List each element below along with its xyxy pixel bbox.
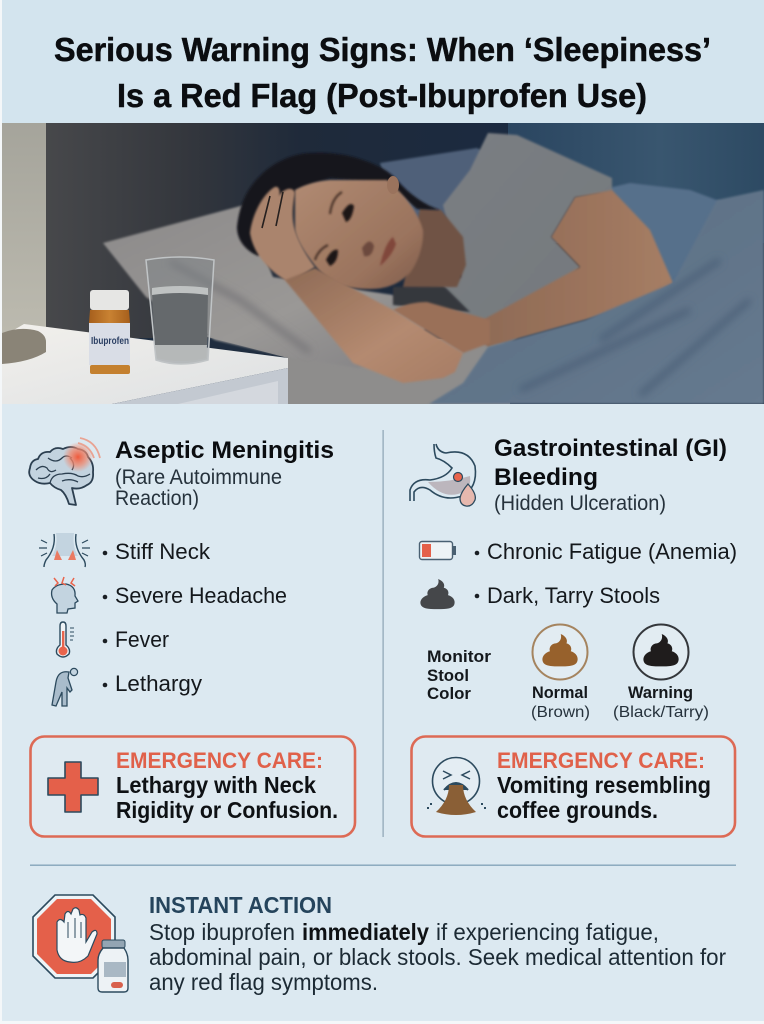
body text: abdominal pain, or black stools. Seek medical attention for xyxy=(149,944,726,970)
main pillow xyxy=(103,205,440,368)
stool color monitor xyxy=(427,624,709,721)
callout text xyxy=(116,748,338,823)
symptom: dark tarry stools xyxy=(420,579,660,609)
ear xyxy=(387,176,399,194)
callout text xyxy=(497,748,711,823)
panel: instant action xyxy=(33,892,726,995)
symptom: dark tarry stools: Dark, Tarry Stools xyxy=(487,583,660,608)
icon: brain xyxy=(29,438,100,505)
header band xyxy=(0,0,764,123)
symptom: stiff neck xyxy=(39,533,211,567)
monitor label: Monitor xyxy=(427,648,492,666)
heading: aseptic meningitis: Aseptic Meningitis xyxy=(115,437,334,464)
heading: gi bleeding: Gastrointestinal (GI) xyxy=(494,435,727,462)
back pillow xyxy=(379,147,480,218)
hand on forehead xyxy=(250,187,315,283)
symptom: fever: Fever xyxy=(115,627,169,652)
callout text: coffee grounds. xyxy=(497,797,658,823)
normal brown stool: Normal xyxy=(532,684,588,702)
lower hand xyxy=(393,302,490,353)
ibuprofen bottle: Ibuprofen xyxy=(91,335,129,347)
title: Is a Red Flag (Post-Ibuprofen Use) xyxy=(117,77,647,114)
subheading: Reaction) xyxy=(115,487,199,510)
monitor label: Color xyxy=(427,685,472,703)
nightstand xyxy=(2,324,288,404)
body text: any red flag symptoms. xyxy=(149,969,378,995)
hair xyxy=(237,153,440,256)
icon: stomach xyxy=(410,444,475,506)
heading: instant action: INSTANT ACTION xyxy=(149,892,332,918)
symptom: lethargy: Lethargy xyxy=(115,671,203,696)
callout text: EMERGENCY CARE: xyxy=(116,748,323,773)
title xyxy=(54,31,711,114)
normal brown stool xyxy=(531,624,590,721)
monitor label xyxy=(427,648,492,703)
subheading xyxy=(115,466,282,510)
warning black stool: (Black/Tarry) xyxy=(613,704,709,721)
water glass xyxy=(146,257,214,364)
heading: gi bleeding: Bleeding xyxy=(494,464,598,491)
symptom: fever xyxy=(56,622,169,657)
body text xyxy=(149,919,726,995)
body text: if experiencing fatigue, xyxy=(436,919,659,945)
symptom: lethargy xyxy=(52,668,203,706)
body text: immediately xyxy=(302,919,429,945)
symptom: stiff neck: Stiff Neck xyxy=(115,539,211,564)
heading: gi bleeding xyxy=(494,435,727,491)
lamp base xyxy=(2,329,46,364)
white edges xyxy=(0,0,2,1024)
eyes brows nose mouth xyxy=(315,192,396,266)
column divider xyxy=(382,430,384,837)
title: Serious Warning Signs: When ‘Sleepiness’ xyxy=(54,31,711,68)
face xyxy=(295,180,423,289)
warning black stool xyxy=(613,624,709,721)
callout text: Rigidity or Confusion. xyxy=(116,797,338,823)
symptom: severe headache xyxy=(52,577,287,613)
warning black stool: Warning xyxy=(628,684,693,702)
icon: stop sign with hand and pill bottle xyxy=(33,895,128,992)
body text: Stop ibuprofen xyxy=(149,919,295,945)
upper arm xyxy=(470,190,673,347)
duvet xyxy=(429,190,764,404)
callout text: EMERGENCY CARE: xyxy=(497,748,705,773)
callout text: Vomiting resembling xyxy=(497,772,711,798)
ibuprofen bottle xyxy=(89,290,130,374)
forearm xyxy=(285,268,463,383)
mattress sheet xyxy=(200,335,510,404)
panel: gastrointestinal bleeding xyxy=(410,435,737,836)
callout: emergency care left xyxy=(30,736,355,836)
symptom: chronic fatigue: Chronic Fatigue (Anemia) xyxy=(487,539,737,564)
icon: vomiting face xyxy=(427,758,486,815)
normal brown stool: (Brown) xyxy=(531,704,590,721)
callout text: Lethargy with Neck xyxy=(116,772,316,798)
under-arm shadow xyxy=(393,285,470,312)
back duvet xyxy=(612,182,718,286)
icon: medical cross xyxy=(48,762,98,812)
callout: emergency care right xyxy=(412,736,735,836)
panel: aseptic meningitis xyxy=(29,437,355,836)
subheading: (Rare Autoimmune xyxy=(115,466,282,489)
symptom: severe headache: Severe Headache xyxy=(115,583,287,608)
neck xyxy=(403,208,466,287)
photo: woman lying in bed with ibuprofen on the nightstand xyxy=(0,123,764,404)
shirt xyxy=(429,133,612,345)
monitor label: Stool xyxy=(427,667,469,685)
subheading: (Hidden Ulceration) xyxy=(494,492,666,515)
